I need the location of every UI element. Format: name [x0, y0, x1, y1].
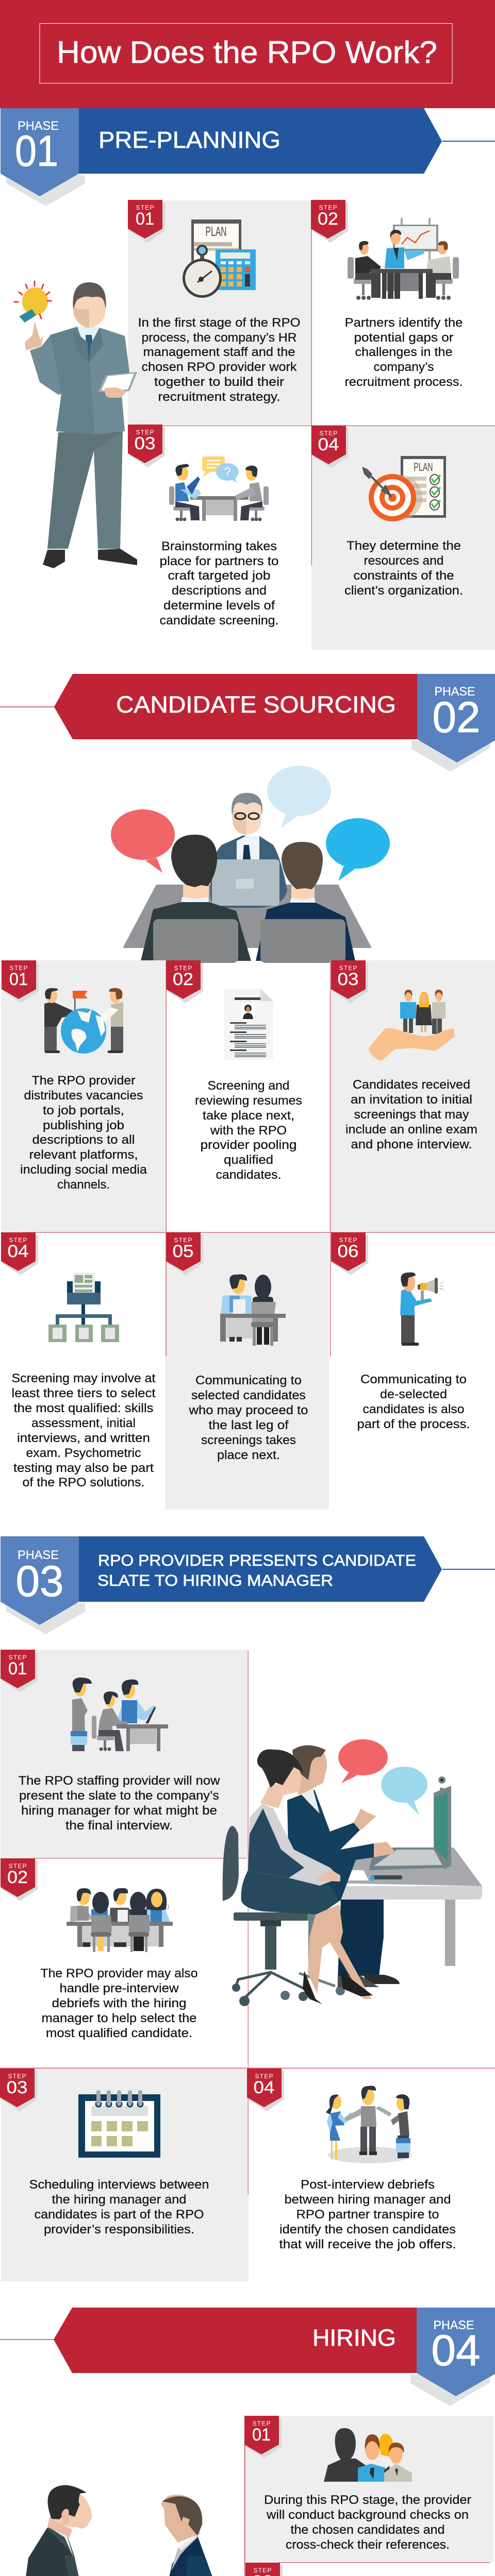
step 01 tab	[2, 960, 39, 1003]
text: phase 3 step 1: present the slate to the company’s	[19, 1789, 219, 1803]
text: phase 3 step 4: RPO partner transpire to	[296, 2208, 439, 2222]
text: phase 1 step 3: place for partners to	[160, 554, 278, 568]
text: phase 1 step 1: recruitment strategy.	[158, 390, 280, 404]
text: phase 1 step 4	[344, 539, 463, 598]
text: phase 2 step 2: Screening and	[207, 1079, 290, 1093]
text: phase 4 step 1	[264, 2493, 471, 2552]
text: phase 1 step 2: company’s	[373, 360, 434, 374]
text: phase 4 step 1: During this RPO stage, the provider	[264, 2493, 471, 2507]
phase 02 heading: CANDIDATE SOURCING	[116, 691, 396, 718]
text: phase 2 step 3: include an online exam	[345, 1123, 477, 1137]
text: phase 1 step 2: recruitment process.	[344, 375, 463, 389]
step 03 tab	[0, 2069, 37, 2111]
phase 01 banner	[1, 108, 495, 206]
text: phase 4 step 1: will conduct background checks on	[266, 2508, 469, 2522]
icon: calendar	[78, 2090, 160, 2158]
text: phase 2 step 1: descriptions to all	[32, 1133, 135, 1147]
panel: phase 4 backgrounds	[244, 2416, 493, 2576]
step 01 tab: STEP	[253, 2420, 270, 2427]
icon: candidates in a hand	[369, 990, 455, 1061]
speech bubble: red	[338, 1739, 388, 1783]
speech bubble: red	[111, 809, 175, 873]
text: phase 3 step 2: debriefs with the hiring	[52, 1996, 187, 2010]
step 01 tab: 01	[252, 2425, 271, 2445]
icon: idea bulb	[14, 281, 51, 323]
text: phase 3 step 4: Post-interview debriefs	[301, 2178, 435, 2192]
text: phase 2 step 4: exam. Psychometric	[26, 1446, 141, 1460]
text: phase 2 step 6	[357, 1372, 470, 1431]
text: phase 2 step 1: publishing job	[43, 1118, 124, 1132]
text: phase 3 step 4: identify the chosen candidates	[279, 2223, 456, 2236]
speech bubble: blue	[326, 818, 390, 881]
illustration: handshake	[24, 2485, 217, 2576]
text: phase 1 step 3: Brainstorming takes	[161, 539, 277, 553]
step 01 tab	[244, 2416, 282, 2459]
step 05 tab	[166, 1232, 203, 1275]
phase 01 heading: PRE-PLANNING	[98, 127, 280, 153]
text: phase 2 step 4: of the RPO solutions.	[23, 1476, 144, 1489]
text: phase 3 step 2: The RPO provider may also	[40, 1967, 198, 1980]
icon: person with megaphone	[400, 1273, 443, 1346]
step 04 tab: 04	[7, 1242, 29, 1261]
title: How Does the RPO Work?	[57, 35, 437, 70]
step 02 tab: STEP	[319, 204, 337, 211]
text: phase 3 step 4	[279, 2178, 456, 2251]
text: phase 3 step 4: that will receive the job offers.	[279, 2238, 456, 2251]
step 02 tab	[245, 2563, 283, 2576]
text: phase 1 step 3	[160, 539, 278, 628]
step 01 tab: 01	[9, 970, 28, 989]
chair	[223, 1826, 345, 2006]
step 03 tab	[128, 425, 165, 467]
step 04 tab: 04	[318, 435, 339, 454]
person: right candidate	[256, 842, 355, 963]
text: phase 3 step 3: the hiring manager and	[52, 2193, 187, 2207]
text: phase 2 step 4	[11, 1371, 156, 1489]
panel: phase 3 backgrounds	[0, 1650, 495, 2281]
step 03 tab: 03	[6, 2078, 28, 2097]
panel: phase 2 backgrounds	[1, 960, 495, 1510]
text: phase 2 step 2	[195, 1079, 302, 1182]
phase 03 label: PHASE	[18, 1548, 59, 1562]
text: phase 1 step 2: challenges in the	[355, 345, 453, 359]
icon: plan, stopwatch, calculator: PLAN	[205, 224, 227, 239]
text: phase 2 step 4: assessment, initial	[31, 1416, 136, 1430]
text: phase 2 step 5: the last leg of	[208, 1418, 289, 1432]
man on the left	[24, 2485, 110, 2576]
text: phase 1 step 4: resources and	[364, 554, 443, 568]
step 04 tab: STEP	[255, 2073, 273, 2080]
phase 03 heading: SLATE TO HIRING MANAGER	[97, 1571, 333, 1589]
icon: two people brainstorming: ?	[224, 465, 231, 479]
text: phase 2 step 1: including social media	[20, 1163, 147, 1177]
phase 02 banner	[0, 674, 495, 772]
text: phase 1 step 3: craft targeted job	[168, 569, 270, 583]
icon: background checks	[324, 2428, 412, 2482]
step 02 tab: 02	[173, 970, 193, 989]
icon: three people at a laptop	[71, 1677, 168, 1751]
phase 04 banner	[0, 2308, 495, 2406]
text: phase 1 step 4: client’s organization.	[344, 584, 463, 598]
phase 04 heading: HIRING	[312, 2325, 396, 2351]
text: phase 2 step 3: screenings that may	[354, 1108, 469, 1122]
text: phase 2 step 2: provider pooling	[200, 1138, 297, 1152]
icon: plan, stopwatch, calculator	[183, 219, 256, 298]
text: phase 2 step 4: least three tiers to select	[11, 1386, 156, 1400]
text: phase 2 step 6: candidates is also	[363, 1402, 464, 1416]
step 01 tab: 01	[136, 209, 154, 229]
step 02 tab: STEP	[8, 1862, 27, 1870]
step 06 tab	[331, 1232, 368, 1275]
phase 01 number: 01	[15, 127, 58, 175]
text: phase 2 step 1: relevant platforms,	[29, 1148, 138, 1162]
man on the right	[133, 2495, 217, 2576]
text: phase 2 step 5: screenings takes	[201, 1433, 296, 1447]
icon: plan and target	[362, 456, 446, 521]
icon: interview at desk	[220, 1274, 286, 1346]
text: phase 3 step 3	[29, 2178, 209, 2236]
text: phase 1 step 1: together to build their	[154, 375, 284, 389]
phase 03 banner	[1, 1536, 495, 1634]
phase 03 number: 03	[15, 1557, 64, 1605]
text: phase 3 step 3: Scheduling interviews between	[29, 2178, 209, 2192]
text: phase 2 step 6: de-selected	[380, 1387, 447, 1401]
text: phase 2 step 4: Screening may involve at	[11, 1371, 156, 1385]
text: phase 2 step 2: with the RPO	[210, 1124, 287, 1138]
step 04 tab: 04	[254, 2078, 274, 2097]
step 05 tab: 05	[172, 1242, 194, 1261]
text: phase 1 step 1: In the first stage of the RPO	[138, 316, 300, 330]
step 01 tab: STEP	[136, 204, 154, 211]
step 04 tab: STEP	[320, 430, 337, 437]
man at computer	[287, 1745, 400, 1987]
speech bubble: blue	[381, 1767, 427, 1815]
step 04 tab	[247, 2069, 284, 2111]
phase 03 heading	[97, 1551, 416, 1589]
phase 02 number: 02	[432, 693, 481, 741]
text: phase 4 step 1: cross-check their references.	[286, 2538, 450, 2552]
text: phase 3 step 1: hiring manager for what might be	[21, 1804, 217, 1818]
phase 02 label: PHASE	[434, 685, 475, 699]
step 06 tab: 06	[337, 1242, 359, 1261]
icon: two people brainstorming	[169, 456, 269, 521]
text: phase 2 step 4: interviews, and written	[17, 1431, 150, 1445]
text: phase 2 step 1: distributes vacancies	[24, 1089, 143, 1103]
step 05 tab: STEP	[174, 1236, 192, 1244]
text: phase 2 step 5: Communicating to	[195, 1374, 302, 1387]
speech bubble: light blue	[267, 766, 331, 828]
text: phase 1 step 2: Partners identify the	[344, 316, 463, 330]
icon: resume	[224, 989, 273, 1060]
step 03 tab: 03	[337, 970, 359, 989]
text: phase 1 step 4: They determine the	[346, 539, 461, 553]
step 03 tab: STEP	[136, 429, 154, 436]
text: phase 2 step 1	[20, 1074, 147, 1192]
text: phase 2 step 6: Communicating to	[360, 1372, 467, 1386]
text: phase 1 step 2: potential gaps or	[354, 331, 454, 345]
step 02 tab	[311, 200, 348, 243]
text: phase 2 step 3: and phone interview.	[351, 1138, 472, 1151]
text: phase 2 step 5: who may proceed to	[188, 1403, 308, 1417]
text: phase 1 step 1: chosen RPO provider work	[141, 360, 298, 374]
text: phase 2 step 5: selected candidates	[191, 1388, 306, 1402]
woman at computer	[241, 1749, 373, 2004]
text: phase 2 step 4: the most qualified: skills	[13, 1401, 154, 1415]
text: phase 3 step 2: manager to help select the	[41, 2011, 197, 2025]
step 02 tab: STEP	[174, 964, 192, 972]
step 03 tab: STEP	[8, 2073, 26, 2080]
step 01 tab: STEP	[8, 1654, 27, 1661]
text: phase 3 step 1: the final interview.	[65, 1819, 173, 1833]
step 01 tab: STEP	[9, 964, 28, 972]
step 06 tab: STEP	[339, 1236, 357, 1244]
step 02 tab	[1, 1858, 38, 1901]
text: phase 2 step 2: candidates.	[216, 1168, 282, 1182]
step 02 tab: STEP	[254, 2567, 271, 2574]
text: phase 1 step 1: process, the company’s HR	[141, 331, 297, 345]
text: phase 4 step 1: the chosen candidates and	[291, 2523, 444, 2537]
text: phase 1 step 3: descriptions and	[172, 584, 267, 598]
text: phase 2 step 2: qualified	[224, 1153, 273, 1167]
text: phase 3 step 3: provider’s responsibilities.	[44, 2223, 194, 2236]
text: phase 2 step 2: reviewing resumes	[195, 1094, 302, 1108]
icon: three people talking	[326, 2086, 411, 2163]
step 04 tab: STEP	[9, 1236, 27, 1244]
step 04 tab	[311, 426, 349, 468]
panel: phase 1 backgrounds	[128, 200, 495, 650]
text: phase 2 step 1: to job portals,	[43, 1104, 124, 1117]
text: phase 1 step 3: candidate screening.	[160, 614, 278, 628]
text: phase 3 step 2	[40, 1967, 198, 2040]
text: phase 2 step 5: place next.	[217, 1448, 280, 1462]
phase 04 number: 04	[431, 2326, 481, 2375]
text: phase 1 step 1	[138, 316, 300, 404]
step 02 tab	[166, 960, 203, 1003]
icon: screening tiers	[48, 1273, 119, 1342]
icon: panel interview	[67, 1888, 173, 1952]
person: left candidate	[141, 835, 251, 963]
text: phase 3 step 1	[19, 1774, 220, 1833]
step 01 tab	[1, 1650, 38, 1692]
illustration: hiring manager and candidate at computer	[223, 1739, 482, 2006]
text: phase 1 step 2	[344, 316, 463, 389]
desk and computer	[305, 1776, 482, 1966]
text: phase 2 step 2: take place next,	[203, 1109, 294, 1123]
text: phase 3 step 2: handle pre-interview	[60, 1981, 179, 1995]
phase 03 heading: RPO PROVIDER PRESENTS CANDIDATE	[98, 1551, 416, 1569]
icon: plan and target: PLAN	[414, 461, 433, 473]
text: phase 2 step 6: part of the process.	[357, 1417, 470, 1431]
step 01 tab: 01	[8, 1659, 27, 1679]
text: phase 3 step 2: most qualified candidate.	[46, 2026, 192, 2040]
text: phase 2 step 3: Candidates received	[353, 1078, 470, 1092]
text: phase 3 step 3: candidates is part of the RPO	[34, 2208, 204, 2222]
illustration: interview with speech bubbles	[111, 766, 390, 963]
step 03 tab	[331, 960, 368, 1003]
text: phase 2 step 4: testing may also be part	[13, 1461, 154, 1475]
text: phase 2 step 1: The RPO provider	[32, 1074, 136, 1088]
step 03 tab: STEP	[339, 964, 357, 972]
icon: two people with globe	[44, 988, 123, 1054]
icon: team at meeting table	[348, 218, 459, 300]
step 01 tab	[128, 200, 165, 243]
text: phase 2 step 5	[188, 1374, 308, 1462]
step 03 tab: 03	[134, 434, 156, 453]
illustration: presenter with idea bulb	[14, 281, 137, 568]
phase 04 label: PHASE	[433, 2318, 474, 2332]
title banner	[0, 0, 495, 108]
step 02 tab: 02	[318, 209, 338, 229]
text: phase 2 step 3: an invitation to initial	[351, 1093, 472, 1107]
text: phase 1 step 3: determine levels of	[163, 599, 275, 613]
text: phase 3 step 1: The RPO staffing provider will now	[19, 1774, 220, 1788]
step 04 tab	[1, 1232, 38, 1275]
step 02 tab: 02	[7, 1868, 28, 1887]
text: phase 3 step 4: between hiring manager and	[285, 2193, 451, 2207]
text: phase 1 step 1: management staff and the	[143, 345, 295, 359]
text: phase 1 step 4: constraints of the	[354, 569, 454, 583]
text: phase 2 step 3	[345, 1078, 477, 1151]
phase 01 label: PHASE	[18, 119, 59, 133]
text: phase 2 step 1: channels.	[57, 1178, 110, 1192]
